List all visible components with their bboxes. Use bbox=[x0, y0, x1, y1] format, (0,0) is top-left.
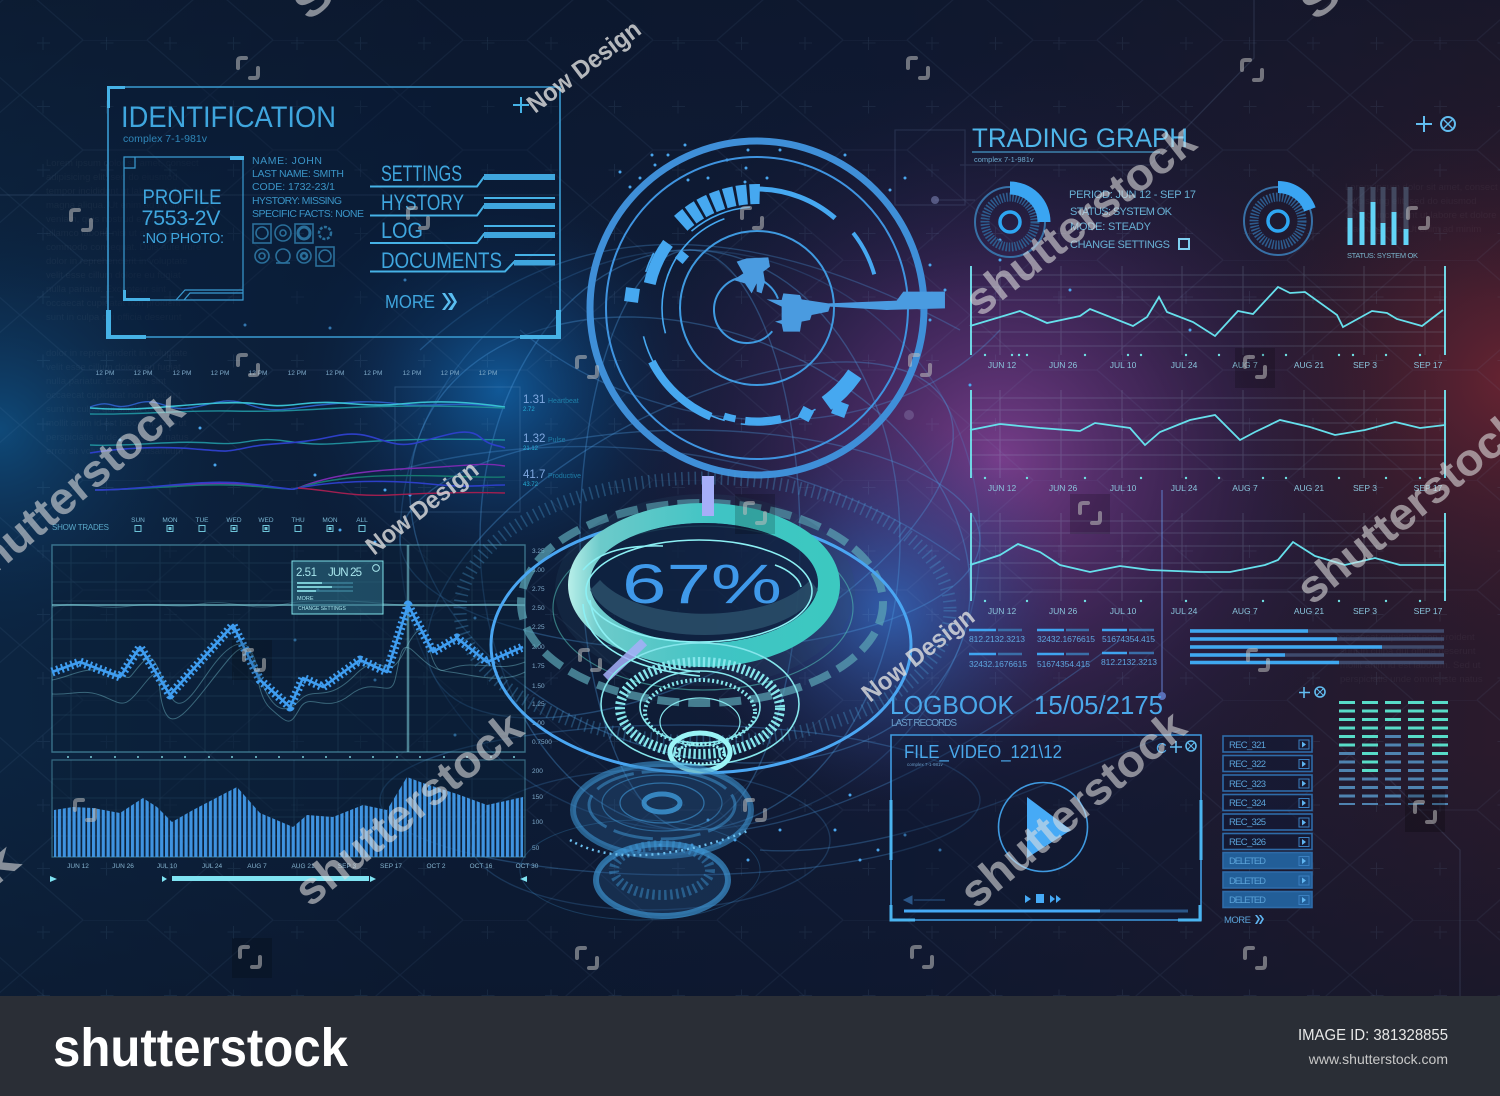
record list: REC_321 bbox=[1229, 740, 1266, 751]
trading chart 1: AUG 7 bbox=[1232, 360, 1258, 370]
bar chart: volume bbox=[50, 760, 543, 882]
profile details: CODE: 1732-23/1 bbox=[252, 181, 335, 193]
mini bars: STATUS: SYSTEM OK bbox=[1347, 251, 1418, 260]
heading: LOGBOOK bbox=[890, 690, 1015, 720]
profile details bbox=[252, 155, 364, 220]
y axis labels bbox=[532, 548, 552, 746]
faint body copy blocks: perspiciatis unde omnis iste natus bbox=[46, 432, 189, 443]
video panel bbox=[891, 735, 1201, 920]
faint body copy blocks: magna aliqua. Ut enim ad minim bbox=[1345, 224, 1481, 235]
profile box bbox=[123, 156, 244, 301]
faint body copy blocks: adipisicing elit, sed do eiusmod bbox=[1345, 196, 1476, 207]
date labels: AUG 7 bbox=[247, 863, 267, 870]
faint body copy blocks: sunt in culpa qui officia deserunt bbox=[46, 404, 182, 415]
time labels: 12 PM bbox=[249, 370, 267, 377]
menu: log: LOG bbox=[381, 218, 423, 243]
watermark icons bbox=[71, 58, 1445, 978]
faint body copy blocks: sunt in culpa qui officia deserunt bbox=[46, 312, 182, 323]
mini bars bbox=[1347, 187, 1418, 260]
watermark text: shutterstock bbox=[950, 699, 1196, 918]
date labels: OCT 2 bbox=[426, 863, 446, 870]
teal ring bbox=[568, 503, 840, 667]
video panel: C bbox=[1156, 740, 1167, 757]
trading chart 1: JUN 26 bbox=[1049, 360, 1077, 370]
faint body copy blocks: veniam, quis nostrud exercitation bbox=[46, 214, 185, 225]
faint body copy blocks: nulla pariatur. Excepteur sint bbox=[46, 376, 166, 387]
value labels: 100 bbox=[532, 819, 543, 826]
time labels: 12 PM bbox=[403, 370, 421, 377]
readouts: Pulse bbox=[548, 437, 566, 444]
y axis labels: 1.00 bbox=[532, 720, 545, 727]
main ellipse bbox=[491, 517, 911, 773]
readouts: Productive bbox=[548, 473, 581, 480]
panel: trading graph bbox=[969, 116, 1455, 669]
data callout: CHANGE SETTINGS bbox=[298, 606, 346, 612]
footer band bbox=[0, 996, 1500, 1096]
time labels: 12 PM bbox=[326, 370, 344, 377]
faint body copy blocks: nulla pariatur. Excepteur sint bbox=[46, 284, 166, 295]
record list: DELETED bbox=[1229, 895, 1266, 906]
date labels: AUG 21 bbox=[291, 863, 315, 870]
panel frame bbox=[108, 87, 560, 337]
trading chart 2: JUL 24 bbox=[1171, 483, 1198, 493]
trading chart 1: JUL 10 bbox=[1110, 360, 1137, 370]
profile box: PROFILE bbox=[142, 185, 222, 209]
date labels: SEP 3 bbox=[338, 863, 357, 870]
time labels: 12 PM bbox=[288, 370, 306, 377]
globe wireframe bbox=[342, 237, 1180, 910]
date labels: OCT 16 bbox=[470, 863, 493, 870]
faint body copy blocks: velit esse cillum dolore eu fugiat bbox=[46, 362, 181, 373]
y axis labels: 2.50 bbox=[532, 605, 545, 612]
date labels: JUL 10 bbox=[157, 863, 178, 870]
image id: IMAGE ID: 381328855 bbox=[1298, 1027, 1448, 1044]
record list: REC_323 bbox=[1229, 779, 1266, 790]
faint body copy blocks: dolor in reprehenderit in voluptate bbox=[46, 348, 188, 359]
record list: REC_326 bbox=[1229, 837, 1266, 848]
record list bbox=[1223, 736, 1312, 926]
trading chart 3: JUL 24 bbox=[1171, 606, 1198, 616]
time labels: 12 PM bbox=[479, 370, 497, 377]
trading chart 1: SEP 17 bbox=[1414, 360, 1443, 370]
record list: REC_322 bbox=[1229, 759, 1266, 770]
blocks bbox=[624, 250, 849, 422]
menu: settings bbox=[370, 161, 555, 186]
status text: PERIOD: JUN 12 - SEP 17 bbox=[1069, 189, 1196, 201]
trading chart 1: JUL 24 bbox=[1171, 360, 1198, 370]
data callout: MORE bbox=[297, 596, 314, 602]
dashed outer ellipse bbox=[521, 503, 883, 703]
date labels: SEP 17 bbox=[380, 863, 402, 870]
status icons bbox=[253, 224, 334, 266]
day selector bbox=[52, 517, 368, 532]
faint body copy blocks: commodo consequat. Duis aute irure bbox=[46, 242, 201, 253]
faint body copy blocks: tempor incididunt ut labore et dolore bbox=[46, 186, 198, 197]
date labels: JUL 24 bbox=[202, 863, 223, 870]
readouts: Heartbeat bbox=[548, 398, 579, 405]
y axis labels: 2.25 bbox=[532, 624, 545, 631]
readouts: 21.12 bbox=[523, 446, 539, 452]
date labels: OCT 30 bbox=[516, 863, 539, 870]
trading chart 2: JUN 12 bbox=[988, 483, 1016, 493]
data codes: 51674354.415 bbox=[1102, 634, 1155, 644]
trading chart 3: JUN 12 bbox=[988, 606, 1016, 616]
readouts: 41.7 bbox=[523, 469, 545, 481]
range slider bbox=[50, 876, 527, 882]
subheading: complex 7-1-981v bbox=[974, 155, 1034, 164]
readouts: 1.32 bbox=[523, 433, 545, 445]
trading chart 2: SEP 17 bbox=[1414, 483, 1443, 493]
value labels: 200 bbox=[532, 768, 543, 775]
trading chart 3: JUN 26 bbox=[1049, 606, 1077, 616]
time labels: 12 PM bbox=[364, 370, 382, 377]
readouts bbox=[523, 394, 581, 488]
faint body copy blocks: mollit anim id est laborum. Sed ut bbox=[46, 418, 187, 429]
video panel: FILE_VIDEO_121\12 bbox=[904, 741, 1062, 763]
y axis labels: 0.7500 bbox=[532, 739, 552, 746]
profile box: :NO PHOTO: bbox=[142, 231, 224, 247]
record list: DELETED bbox=[1229, 876, 1266, 887]
y axis labels: 2.00 bbox=[532, 644, 545, 651]
y axis labels: 1.25 bbox=[532, 701, 545, 708]
play button bbox=[998, 782, 1088, 872]
faint body copy blocks bbox=[46, 158, 1498, 685]
purple markers bbox=[702, 476, 714, 516]
menu: log bbox=[370, 218, 555, 243]
record list: REC_324 bbox=[1229, 798, 1266, 809]
data callout: JUN 25 bbox=[328, 567, 362, 579]
trading chart 1: JUN 12 bbox=[988, 360, 1016, 370]
ship silhouette bbox=[733, 257, 945, 332]
heading: IDENTIFICATION bbox=[121, 101, 336, 134]
y axis labels: 1.75 bbox=[532, 663, 545, 670]
time labels: 12 PM bbox=[211, 370, 229, 377]
envelope lines bbox=[52, 630, 525, 721]
donut: period bbox=[975, 187, 1045, 257]
faint body copy blocks: mollit anim id est laborum. Sed ut bbox=[1340, 660, 1481, 671]
data codes: 32432.1676615 bbox=[969, 659, 1027, 669]
trading chart 2: AUG 21 bbox=[1294, 483, 1324, 493]
window controls: logbook bbox=[1299, 687, 1325, 698]
time labels: 12 PM bbox=[441, 370, 459, 377]
day selector: TUE bbox=[196, 517, 209, 524]
readouts: 1.31 bbox=[523, 394, 545, 406]
value labels: 50 bbox=[532, 845, 540, 852]
menu: history bbox=[370, 190, 555, 216]
day selector: THU bbox=[291, 517, 305, 524]
progress bars bbox=[1190, 631, 1444, 662]
profile details: NAME: JOHN bbox=[252, 155, 322, 167]
transport controls bbox=[1025, 894, 1061, 903]
profile details: SPECIFIC FACTS: NONE bbox=[252, 208, 364, 220]
value labels bbox=[532, 768, 543, 852]
faint body copy blocks: Lorem ipsum dolor sit amet, consect bbox=[46, 158, 199, 169]
time labels bbox=[96, 370, 497, 377]
y axis labels: 3.00 bbox=[532, 567, 545, 574]
segment arcs bbox=[596, 147, 918, 469]
trading chart 3: AUG 7 bbox=[1232, 606, 1258, 616]
faint body copy blocks: tempor incididunt ut labore et dolore bbox=[1345, 210, 1497, 221]
trading chart 1: SEP 3 bbox=[1353, 360, 1377, 370]
day selector: MON bbox=[322, 517, 338, 524]
gauge value: 67% bbox=[622, 552, 782, 615]
trading chart 3: AUG 21 bbox=[1294, 606, 1324, 616]
date: 15/05/2175 bbox=[1034, 690, 1163, 720]
faint body copy blocks: error sit voluptatem accusantium bbox=[46, 446, 183, 457]
trading chart 1 bbox=[970, 266, 1445, 370]
price line bbox=[52, 605, 523, 707]
date labels: JUN 26 bbox=[112, 863, 134, 870]
day selector: WED bbox=[226, 517, 242, 524]
watermark text: shutterstock bbox=[284, 701, 533, 916]
more link: MORE bbox=[385, 292, 435, 312]
site url: www.shutterstock.com bbox=[1308, 1051, 1448, 1067]
status text: MODE: STEADY bbox=[1070, 221, 1152, 233]
y axis labels: 1.50 bbox=[532, 683, 545, 690]
bars bbox=[54, 777, 523, 857]
y axis labels: 2.75 bbox=[532, 586, 545, 593]
line chart: vitals bbox=[90, 370, 581, 512]
trading chart 3: JUL 10 bbox=[1110, 606, 1137, 616]
data codes: 51674354.415 bbox=[1037, 659, 1090, 669]
equalizer bbox=[1347, 701, 1440, 805]
faint body copy blocks: velit esse cillum dolore eu fugiat bbox=[46, 270, 181, 281]
data codes bbox=[969, 630, 1157, 669]
panel: logbook bbox=[890, 690, 1201, 920]
record list: REC_325 bbox=[1229, 817, 1266, 828]
progress bar bbox=[904, 910, 1188, 912]
thin inner rings bbox=[583, 540, 812, 676]
trading chart 1: AUG 21 bbox=[1294, 360, 1324, 370]
y axis labels: 3.25 bbox=[532, 548, 545, 555]
gear stack bbox=[601, 643, 799, 771]
date labels bbox=[67, 863, 539, 870]
tick ring bbox=[460, 478, 950, 742]
watermark text: Now Design bbox=[360, 456, 484, 561]
faint body copy blocks: Lorem ipsum dolor sit amet, consect bbox=[1345, 182, 1498, 193]
line chart: price bbox=[52, 545, 552, 757]
lower hologram discs bbox=[520, 764, 760, 920]
day selector: SHOW TRADES bbox=[52, 523, 109, 532]
trading chart 2: JUN 26 bbox=[1049, 483, 1077, 493]
menu: history: HYSTORY bbox=[381, 190, 464, 215]
day selector: SUN bbox=[131, 517, 145, 524]
data codes: 812.2132.3213 bbox=[1101, 657, 1157, 667]
heartbeat lines bbox=[90, 401, 505, 495]
faint body copy blocks: magna aliqua. Ut enim ad minim bbox=[46, 200, 182, 211]
subheading: complex 7-1-981v bbox=[123, 133, 208, 145]
date labels: JUN 12 bbox=[67, 863, 89, 870]
day selector: MON bbox=[162, 517, 178, 524]
radar dial bbox=[586, 137, 945, 479]
status text: STATUS: SYSTEM OK bbox=[1070, 206, 1173, 218]
trading chart 2: SEP 3 bbox=[1353, 483, 1377, 493]
data callout bbox=[292, 561, 383, 614]
panel: identification bbox=[106, 86, 561, 339]
plus icon bbox=[513, 97, 529, 113]
thin green ellipse bbox=[553, 526, 853, 690]
readouts: 43.72 bbox=[523, 482, 539, 488]
watermark text: Now Design bbox=[522, 15, 646, 119]
status text: CHANGE SETTINGS bbox=[1070, 239, 1170, 251]
menu: settings: SETTINGS bbox=[381, 161, 462, 186]
heading: TRADING GRAPH bbox=[972, 123, 1188, 153]
watermark text: Now Design bbox=[856, 603, 980, 708]
data codes: 812.2132.3213 bbox=[969, 634, 1025, 644]
trading chart 3: SEP 3 bbox=[1353, 606, 1377, 616]
faint body copy blocks: sunt in culpa qui officia deserunt bbox=[1340, 646, 1476, 657]
trading chart 2: JUL 10 bbox=[1110, 483, 1137, 493]
footer logo: shutterstock bbox=[53, 1018, 349, 1078]
day selector: WED bbox=[258, 517, 274, 524]
profile box: 7553-2V bbox=[142, 206, 221, 230]
data codes: 32432.1676615 bbox=[1037, 634, 1095, 644]
trading chart 3: SEP 17 bbox=[1414, 606, 1443, 616]
readouts: 2.72 bbox=[523, 407, 535, 413]
faint body copy blocks: dolor in reprehenderit in voluptate bbox=[46, 256, 188, 267]
video panel: complex 7-1-981v bbox=[907, 762, 944, 767]
trading chart 3 bbox=[970, 513, 1445, 616]
faint body copy blocks: ullamco laboris nisi ut aliquip ex ea bbox=[46, 228, 194, 239]
status text bbox=[1069, 189, 1196, 251]
profile details: HYSTORY: MISSING bbox=[252, 195, 342, 207]
faint body copy blocks: occaecat cupidatat non proident bbox=[1340, 632, 1475, 643]
donut: status bbox=[1244, 187, 1312, 255]
time labels: 12 PM bbox=[134, 370, 152, 377]
chart frame and grid bbox=[52, 545, 525, 752]
menu: documents: DOCUMENTS bbox=[381, 248, 502, 273]
outer rings bbox=[590, 141, 924, 475]
faint body copy blocks: occaecat cupidatat non proident bbox=[46, 298, 181, 309]
record list: DELETED bbox=[1229, 856, 1266, 867]
time labels: 12 PM bbox=[173, 370, 191, 377]
value labels: 150 bbox=[532, 794, 543, 801]
trading chart 2 bbox=[970, 390, 1445, 493]
percentage gauge bbox=[491, 476, 911, 773]
trading chart 2: AUG 7 bbox=[1232, 483, 1258, 493]
data callout: 2.51 bbox=[296, 567, 317, 579]
faint body copy blocks: adipisicing elit, sed do eiusmod bbox=[46, 172, 178, 183]
scattered data particles bbox=[120, 145, 1190, 860]
subheading: LAST RECORDS bbox=[891, 718, 957, 729]
window controls bbox=[1416, 116, 1455, 132]
profile details: LAST NAME: SMITH bbox=[252, 168, 344, 180]
record list: MORE bbox=[1224, 915, 1251, 926]
watermark text: shutterstock bbox=[955, 114, 1206, 326]
faint body copy blocks: perspiciatis unde omnis iste natus bbox=[1340, 674, 1483, 685]
faint body copy blocks: occaecat cupidatat non proident bbox=[46, 390, 181, 401]
time labels: 12 PM bbox=[96, 370, 114, 377]
day selector: ALL bbox=[356, 517, 368, 524]
